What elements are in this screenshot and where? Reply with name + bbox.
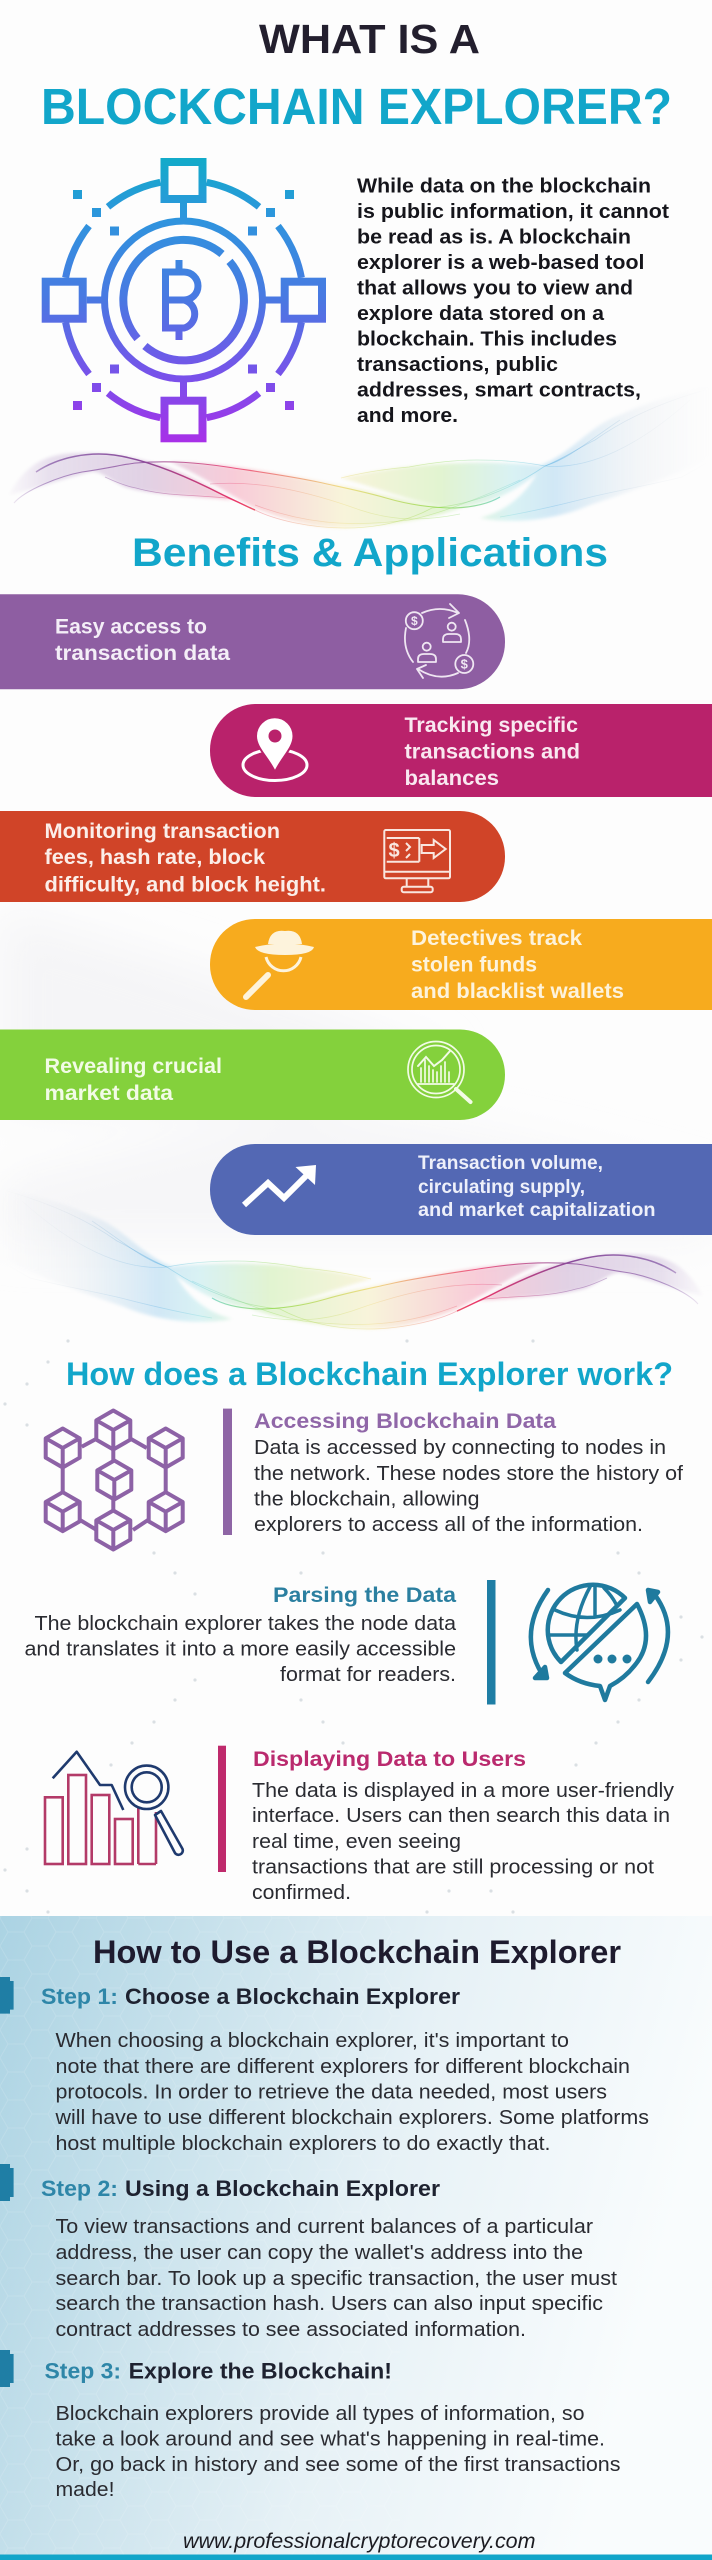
- intro paragraph: blockchain. This includes: [357, 328, 617, 350]
- intro paragraph: be read as is. A blockchain: [357, 226, 631, 248]
- intro paragraph: explore data stored on a: [357, 302, 605, 325]
- icon: detective: [246, 931, 314, 997]
- text: market data: Revealing crucial: [44, 1055, 222, 1078]
- heading: how to use: How to Use a Blockchain Explorer: [93, 1934, 621, 1970]
- step 1 body: [54, 2030, 649, 2155]
- text: displaying body: transactions that are still processing or not: [252, 1856, 654, 1878]
- text: monitoring: fees, hash rate, block: [44, 846, 265, 869]
- step 1 heading: Choose a Blockchain Explorer: [125, 1984, 460, 2009]
- footer url: www.professionalcryptorecovery.com: [183, 2530, 536, 2553]
- heading: accessing blockchain data: Accessing Blockchain Data: [254, 1410, 556, 1433]
- icon: location pin: [243, 717, 307, 780]
- section: accessing data: [46, 1409, 683, 1550]
- step 3 body: [56, 2403, 620, 2501]
- intro paragraph: transactions, public: [357, 353, 558, 376]
- title line: blockchain explorer: BLOCKCHAIN EXPLORER?: [41, 78, 672, 135]
- step 3 body: Or, go back in history and see some of the first transactions: [56, 2454, 620, 2476]
- text: transaction volume: circulating supply,: [418, 1177, 585, 1198]
- panel: monitoring: [0, 811, 505, 902]
- icon: chart with magnifier: [45, 1752, 183, 1864]
- icon: exchange loop: $: [461, 656, 469, 672]
- step 2 heading: Using a Blockchain Explorer: [125, 2176, 440, 2201]
- step 2 body: address, the user can copy the wallet's address into the: [56, 2242, 583, 2264]
- step 3 body: take a look around and see what's happening in real-time.: [56, 2428, 605, 2450]
- accent bar: purple: [223, 1409, 232, 1535]
- panel: transaction volume: [210, 1144, 712, 1235]
- step 1 body: note that there are different explorers for different blockchain: [56, 2056, 630, 2078]
- section: displaying data: [45, 1746, 674, 1904]
- icon: bitcoin network: [46, 162, 322, 438]
- icon: magnified chart: [408, 1042, 470, 1102]
- step 2 heading: Step 2:: [41, 2176, 118, 2201]
- step 1 body: protocols. In order to retrieve the data needed, most users: [56, 2082, 607, 2104]
- text: accessing body: explorers to access all of the information.: [254, 1514, 643, 1536]
- icon: globe and chat: [531, 1585, 668, 1700]
- text: monitoring: Monitoring transaction: [44, 820, 280, 843]
- text: detectives: [411, 927, 624, 1003]
- text: accessing body: the blockchain, allowing: [254, 1489, 480, 1511]
- text: transaction volume: and market capitalization: [418, 1200, 656, 1221]
- text: detectives: Detectives track: [411, 927, 582, 950]
- text: parsing body: The blockchain explorer takes the node data: [34, 1613, 457, 1635]
- text: market data: [44, 1055, 222, 1105]
- step 3 heading: Step 3:: [44, 2358, 121, 2384]
- text: tracking: Tracking specific: [404, 714, 578, 737]
- accent bar: blue: [487, 1580, 496, 1704]
- step 1 body: will have to use different blockchain explorers. Some platforms: [54, 2107, 649, 2129]
- rainbow wave: lower: [0, 1186, 703, 1329]
- step 1 heading: Step 1:: [41, 1984, 118, 2009]
- intro paragraph: While data on the blockchain: [357, 174, 651, 198]
- rainbow wave: top: [9, 385, 712, 528]
- icon: exchange loop: [405, 604, 473, 678]
- text: accessing body: the network. These nodes store the history of: [254, 1463, 683, 1485]
- text: detectives: and blacklist wallets: [411, 980, 624, 1003]
- intro paragraph: and more.: [357, 404, 458, 427]
- accent bar: magenta: [218, 1746, 226, 1872]
- text: easy access: Easy access to: [55, 616, 207, 639]
- text: parsing body: format for readers.: [280, 1664, 456, 1686]
- step 2 body: To view transactions and current balances of a particular: [56, 2216, 593, 2238]
- intro paragraph: explorer is a web-based tool: [357, 251, 644, 274]
- text: parsing body: [24, 1613, 457, 1686]
- step 1 body: When choosing a blockchain explorer, it's important to: [56, 2030, 569, 2052]
- text: displaying body: interface. Users can then search this data in: [252, 1805, 670, 1827]
- heading: how does it work: How does a Blockchain Explorer work?: [66, 1356, 673, 1392]
- panel: tracking: [210, 704, 712, 797]
- text: tracking: transactions and: [404, 741, 580, 764]
- step 2 body: search the transaction hash. Users can also input specific: [56, 2293, 603, 2315]
- step 3 body: Blockchain explorers provide all types of information, so: [56, 2403, 584, 2425]
- tab marker: step 2: [0, 2164, 14, 2201]
- icon: exchange loop: $: [411, 614, 418, 628]
- step 2 body: contract addresses to see associated information.: [56, 2319, 526, 2341]
- step 3 body: made!: [56, 2479, 114, 2501]
- step 2 body: search bar. To look up a specific transaction, the user must: [56, 2268, 617, 2290]
- icon: cube network: [46, 1410, 183, 1550]
- text: displaying body: The data is displayed in a more user-friendly: [252, 1780, 674, 1802]
- text: accessing body: [254, 1437, 683, 1536]
- heading: parsing the data: Parsing the Data: [273, 1584, 456, 1607]
- intro paragraph: is public information, it cannot: [357, 200, 669, 223]
- text: transaction volume: [418, 1153, 656, 1221]
- panel: how to use: [0, 1916, 712, 2560]
- text: transaction volume: Transaction volume,: [418, 1153, 603, 1174]
- tab marker: step 1: [0, 1977, 14, 2014]
- section: parsing data: [24, 1580, 668, 1704]
- text: monitoring: difficulty, and block height.: [44, 874, 326, 897]
- step 1 body: host multiple blockchain explorers to do exactly that.: [56, 2133, 550, 2155]
- step 3 heading: Explore the Blockchain!: [129, 2358, 392, 2384]
- intro paragraph: that allows you to view and: [357, 276, 633, 300]
- text: displaying body: confirmed.: [252, 1882, 351, 1904]
- text: parsing body: and translates it into a more easily accessible: [24, 1638, 456, 1660]
- icon: monitor transfer: [384, 830, 450, 892]
- text: detectives: stolen funds: [411, 954, 537, 976]
- panel: market data: [0, 1030, 505, 1120]
- text: easy access: transaction data: [55, 642, 230, 665]
- title: [41, 16, 672, 135]
- panel: easy access: [0, 594, 505, 689]
- heading: displaying data: Displaying Data to Users: [253, 1748, 526, 1771]
- text: market data: market data: [44, 1082, 173, 1105]
- step 2 body: [56, 2216, 617, 2341]
- text: tracking: balances: [404, 767, 499, 790]
- icon: monitor transfer: $: [388, 840, 400, 862]
- intro paragraph: [357, 174, 669, 427]
- icon: rising arrow: [244, 1165, 316, 1205]
- text: tracking: [404, 714, 580, 790]
- title line: what is a: WHAT IS A: [259, 16, 480, 62]
- text: displaying body: [252, 1780, 674, 1904]
- text: monitoring: [44, 820, 326, 897]
- heading: benefits and applications: Benefits & Applications: [132, 531, 608, 575]
- text: displaying body: real time, even seeing: [252, 1831, 461, 1853]
- text: easy access: [55, 616, 230, 665]
- text: accessing body: Data is accessed by connecting to nodes in: [254, 1437, 666, 1459]
- tab marker: step 3: [0, 2350, 14, 2387]
- panel: detectives: [210, 919, 712, 1010]
- intro paragraph: addresses, smart contracts,: [357, 378, 641, 402]
- bottom bar: [0, 2554, 712, 2560]
